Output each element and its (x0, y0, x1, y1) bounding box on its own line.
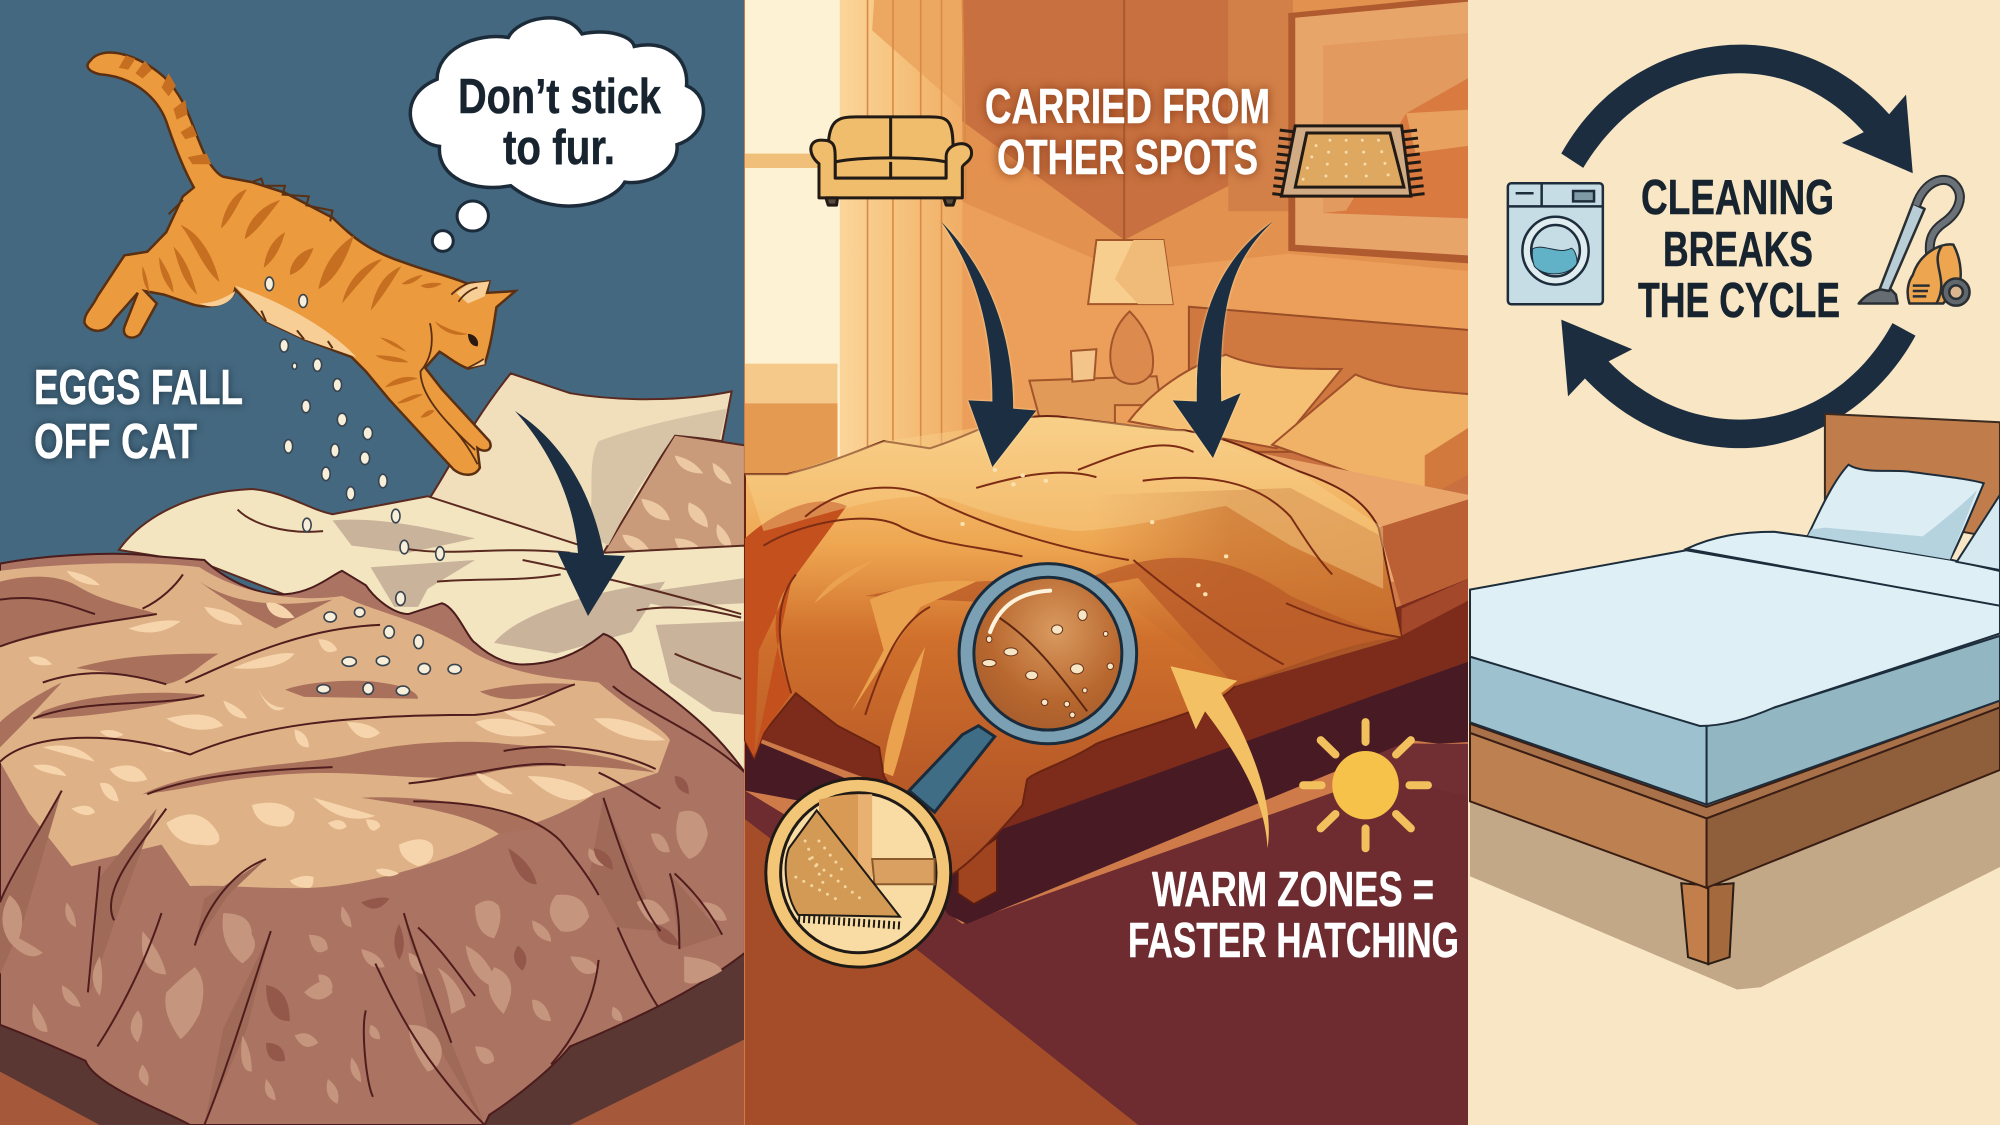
cat stripes (119, 55, 468, 418)
duvet fold lines (763, 445, 1402, 715)
label: warm zones: FASTER HATCHING (1128, 914, 1459, 968)
label: eggs fall off cat (34, 361, 243, 469)
duvet (745, 416, 1402, 877)
headboard (1189, 307, 1470, 452)
bed pillows (1129, 355, 1470, 499)
label: carried from other spots: OTHER SPOTS (997, 131, 1258, 185)
label: cleaning breaks the cycle: CLEANING (1641, 171, 1834, 225)
quilt dark pattern (2, 811, 727, 1104)
cycle arrow: bottom (1561, 320, 1915, 448)
label: warm zones (1128, 863, 1459, 968)
panel: carried from other spots (744, 0, 1476, 1125)
window (745, 0, 842, 486)
icon: sofa (811, 117, 972, 205)
cream sheet (119, 489, 745, 783)
framed picture (1288, 0, 1470, 263)
cat (84, 53, 515, 475)
quilt light pattern (29, 571, 665, 888)
arrow: down onto bedding (515, 411, 625, 616)
label: carried from other spots: CARRIED FROM (985, 80, 1270, 134)
bubble text (460, 77, 662, 165)
arrow: from rug to bed (1173, 221, 1273, 458)
quilt fold lines (0, 574, 745, 1125)
label: carried from other spots (985, 80, 1270, 185)
flea egg specks (962, 470, 1226, 594)
falling eggs (265, 277, 444, 560)
patterned quilt (0, 554, 745, 1125)
bed leg (1681, 883, 1734, 964)
bed frame (1470, 701, 2000, 888)
arrow: warm zone (1170, 666, 1269, 848)
cat outer fur tufts (169, 179, 333, 348)
mattress (1470, 550, 2000, 805)
icon: washing machine (1508, 183, 1603, 304)
floor shadow (1470, 765, 2000, 990)
panel: eggs fall off the cat (0, 0, 745, 1125)
label: cleaning breaks the cycle: THE CYCLE (1638, 274, 1840, 328)
patterned pillow (605, 436, 744, 552)
magnifying glass (909, 564, 1137, 812)
top sheet (1686, 532, 2000, 606)
label: cleaning breaks the cycle: BREAKS (1663, 223, 1813, 277)
headboard (1825, 414, 2000, 539)
floor (745, 740, 1470, 1125)
pillow shading (584, 409, 727, 546)
under-bed shadow (745, 661, 1470, 924)
mattress and bed frame (745, 452, 1470, 830)
inset: rug corner (766, 778, 951, 967)
bedroom wall (962, 0, 1468, 494)
label: eggs fall off cat: EGGS FALL (34, 361, 243, 415)
cat face and leg lines (420, 282, 484, 464)
bubble text: to fur. (503, 121, 615, 175)
arrow: from sofa to bed (942, 222, 1036, 467)
label: warm zones: WARM ZONES = (1152, 863, 1434, 917)
icon: sun (1303, 722, 1428, 848)
cat belly (200, 281, 489, 368)
icon: rug (1279, 126, 1418, 196)
bed legs (958, 837, 997, 904)
white pillow (428, 373, 732, 553)
bed shadow and floor (0, 954, 744, 1125)
label: cleaning breaks the cycle (1638, 171, 1840, 328)
label: eggs fall off cat: OFF CAT (34, 415, 197, 469)
thought bubble (410, 18, 703, 251)
quilt shaded wedges (0, 791, 722, 1125)
bubble text: Don’t stick (458, 70, 662, 124)
pillows (1808, 465, 2000, 570)
eggs on the quilt (317, 592, 461, 695)
cat eye (468, 334, 478, 346)
curtain (840, 0, 966, 463)
icon: vacuum cleaner (1859, 180, 1970, 306)
cycle arrow: top (1561, 45, 1913, 173)
lamp and nightstand (1029, 240, 1173, 430)
panel: cleaning breaks the cycle (1468, 0, 2000, 1125)
